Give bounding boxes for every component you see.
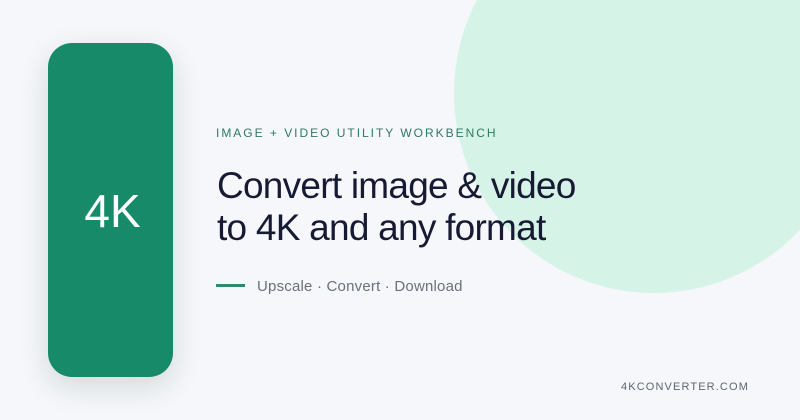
title — [217, 165, 576, 248]
tagline: Upscale · Convert · Download — [257, 278, 463, 295]
domain footer: 4KCONVERTER.COM — [621, 381, 749, 393]
accent line — [216, 284, 245, 287]
decorative mint circle — [454, 0, 800, 293]
eyebrow text: IMAGE + VIDEO UTILITY WORKBENCH — [216, 126, 498, 140]
title: Convert image & video — [217, 165, 576, 206]
panel: green 4K card — [48, 43, 173, 377]
card label: 4K: 4K — [84, 185, 141, 237]
title: to 4K and any format — [217, 207, 545, 248]
